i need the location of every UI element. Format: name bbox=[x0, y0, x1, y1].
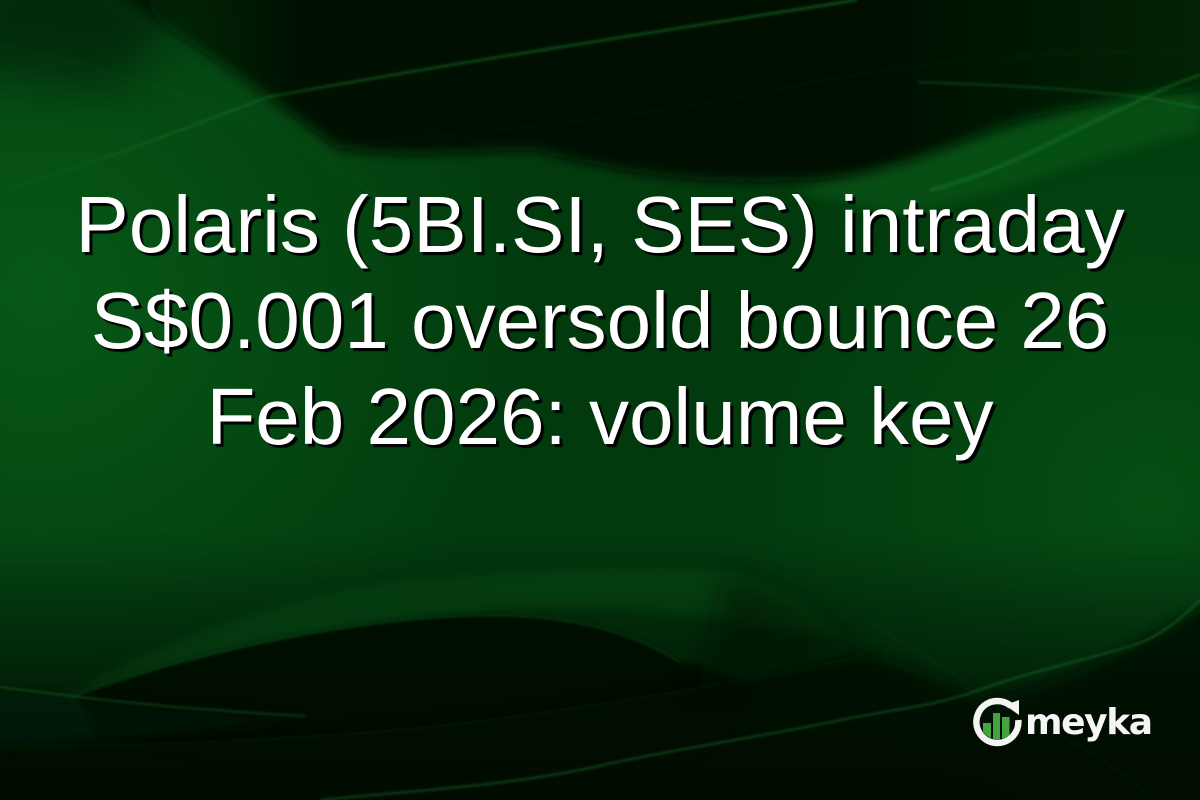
bottom dark apex bbox=[76, 615, 751, 760]
wordmark: meyka bbox=[1025, 702, 1152, 743]
title bbox=[75, 180, 1128, 464]
title: S$0.001 oversold bounce 26 bbox=[91, 276, 1109, 365]
bottom dark fill bbox=[0, 596, 1200, 800]
logo: meyka bbox=[973, 698, 1152, 746]
top dark region bbox=[100, 0, 1200, 181]
title: Polaris (5BI.SI, SES) intraday bbox=[75, 180, 1125, 269]
top left corner shade bbox=[0, 0, 220, 90]
lower right lens band bbox=[790, 95, 1200, 215]
title: Feb 2026: volume key bbox=[206, 372, 994, 461]
icon: circular arrow with bars bbox=[973, 698, 1022, 746]
lower-right arc shade bbox=[690, 578, 900, 690]
left triangle shade bbox=[0, 690, 300, 748]
bottom band light bbox=[60, 569, 840, 700]
